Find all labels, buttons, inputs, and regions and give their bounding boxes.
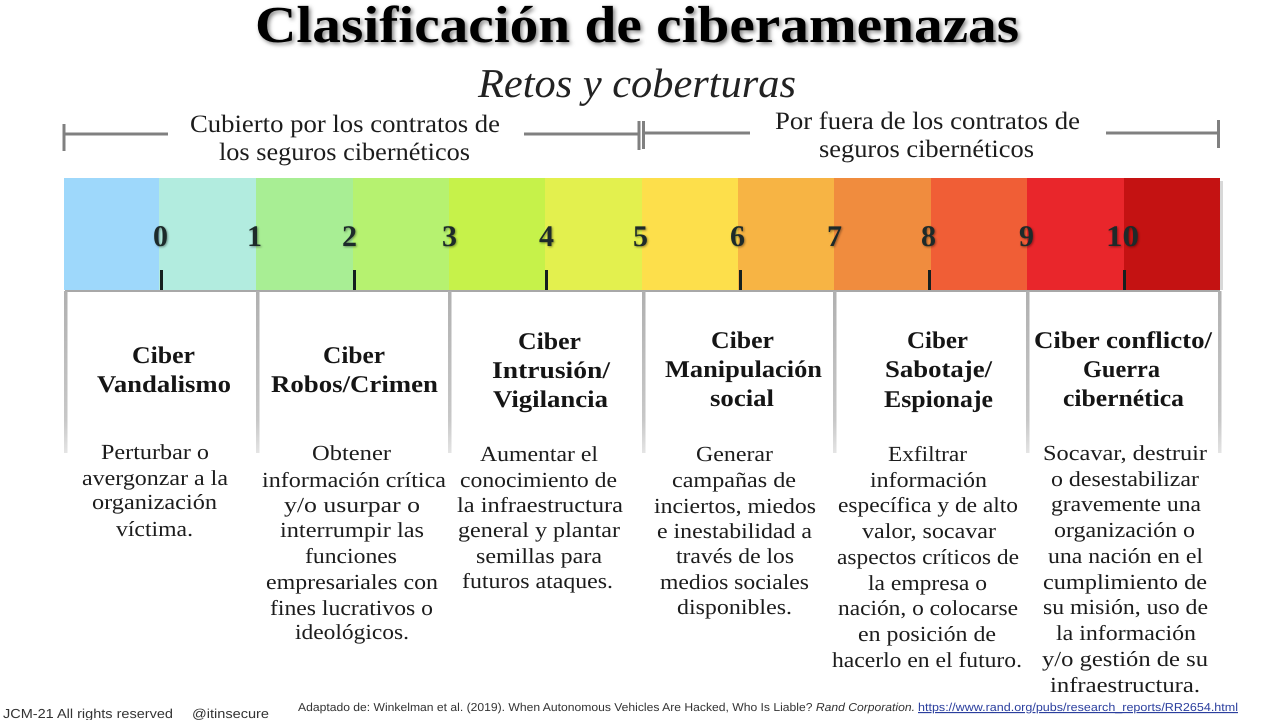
description: ciber robos/crimen: interrumpir las bbox=[280, 518, 424, 542]
description: ciber robos/crimen: fines lucrativos o bbox=[270, 596, 433, 620]
description: ciber sabotaje/espionaje: información bbox=[870, 468, 987, 492]
description: ciber sabotaje/espionaje: nación, o colocarse bbox=[838, 596, 1018, 620]
bracket: covered by cyber insurance bbox=[62, 111, 640, 166]
heading: ciber vandalismo: Ciber bbox=[132, 343, 195, 369]
description: ciber conflicto/guerra cibernética: una nación en el bbox=[1048, 544, 1203, 568]
description: ciber manipulación social: inciertos, miedos bbox=[654, 494, 816, 518]
column divider lines bbox=[64, 290, 1222, 453]
description: ciber vandalismo bbox=[82, 440, 228, 541]
heading: ciber robos/crimen: Robos/Crimen bbox=[271, 372, 438, 398]
description: ciber manipulación social: campañas de bbox=[672, 468, 796, 492]
footer: source link: https://www.rand.org/pubs/research_reports/RR2654.html bbox=[918, 702, 1238, 714]
description: ciber sabotaje/espionaje: valor, socavar bbox=[862, 519, 996, 543]
scale numbers: 9 bbox=[1019, 220, 1034, 253]
scale numbers: 2 bbox=[342, 220, 357, 253]
description: ciber sabotaje/espionaje: Exfiltrar bbox=[888, 442, 967, 466]
heading: ciber manipulación social: social bbox=[710, 386, 774, 412]
description: ciber conflicto/guerra cibernética bbox=[1042, 441, 1208, 697]
description: ciber sabotaje/espionaje: la empresa o bbox=[868, 571, 987, 595]
description: ciber conflicto/guerra cibernética: cumplimiento de bbox=[1043, 570, 1207, 594]
heading: ciber vandalismo bbox=[97, 343, 231, 398]
subtitle: Retos y coberturas bbox=[477, 60, 796, 106]
bracket label: covered bbox=[190, 111, 500, 166]
heading: ciber conflicto/guerra cibernética: Guerra bbox=[1083, 357, 1160, 383]
scale numbers: 8 bbox=[921, 220, 936, 253]
heading: ciber sabotaje/espionaje: Ciber bbox=[907, 328, 968, 354]
description: ciber conflicto/guerra cibernética: gravemente una bbox=[1051, 492, 1201, 516]
scale tick marks bbox=[160, 270, 1126, 291]
heading: ciber sabotaje/espionaje bbox=[884, 328, 993, 413]
heading: ciber intrusión/vigilancia bbox=[492, 329, 610, 413]
description: ciber sabotaje/espionaje: específica y de alto bbox=[838, 493, 1018, 517]
heading: ciber robos/crimen: Ciber bbox=[323, 343, 385, 369]
description: ciber conflicto/guerra cibernética: y/o gestión de su bbox=[1042, 647, 1208, 671]
description: ciber conflicto/guerra cibernética: Socavar, destruir bbox=[1043, 441, 1207, 465]
description: ciber robos/crimen: y/o usurpar o bbox=[284, 493, 420, 517]
description: ciber sabotaje/espionaje: hacerlo en el futuro. bbox=[832, 648, 1022, 672]
description: ciber intrusión/vigilancia: general y plantar bbox=[458, 518, 620, 542]
description: ciber sabotaje/espionaje: aspectos críticos de bbox=[837, 545, 1019, 569]
description: ciber intrusión/vigilancia: futuros ataques. bbox=[462, 569, 613, 593]
scale numbers: 7 bbox=[827, 220, 842, 253]
description: ciber intrusión/vigilancia: semillas para bbox=[476, 544, 602, 568]
description: ciber intrusión/vigilancia: conocimiento de bbox=[460, 468, 617, 492]
description: ciber sabotaje/espionaje: en posición de bbox=[858, 622, 996, 646]
description: ciber manipulación social: e inestabilidad a bbox=[657, 519, 813, 543]
description: ciber vandalismo: víctima. bbox=[116, 517, 193, 541]
description: ciber manipulación social bbox=[654, 442, 816, 619]
bracket label: covered: los seguros cibernéticos bbox=[219, 139, 470, 166]
description: ciber sabotaje/espionaje bbox=[832, 442, 1022, 672]
bracket: outside cyber insurance bbox=[642, 108, 1220, 163]
heading: ciber conflicto/guerra cibernética: cibernética bbox=[1063, 386, 1184, 412]
description: ciber vandalismo: avergonzar a la bbox=[82, 466, 228, 490]
footer: source citation: Adaptado de: Winkelman et al. (2019). When Autonomous Vehicles Are Hacked, Who Is Liable? Rand Corporation. bbox=[298, 702, 915, 714]
description: ciber robos/crimen: Obtener bbox=[312, 441, 391, 465]
description: ciber intrusión/vigilancia bbox=[457, 442, 624, 593]
scale numbers: 6 bbox=[730, 220, 745, 253]
panel: ciber conflicto/guerra cibernética bbox=[1034, 328, 1212, 697]
description: ciber robos/crimen: ideológicos. bbox=[295, 620, 409, 644]
severity colour scale bbox=[64, 178, 1223, 290]
scale numbers bbox=[153, 220, 1139, 253]
scale numbers: 5 bbox=[633, 220, 648, 253]
description: ciber conflicto/guerra cibernética: o desestabilizar bbox=[1051, 467, 1199, 491]
description: ciber robos/crimen: funciones bbox=[305, 544, 397, 568]
description: ciber conflicto/guerra cibernética: su misión, uso de bbox=[1043, 595, 1208, 619]
heading: ciber sabotaje/espionaje: Sabotaje/ bbox=[885, 357, 992, 383]
description: ciber robos/crimen: empresariales con bbox=[266, 570, 438, 594]
scale numbers: 3 bbox=[442, 220, 457, 253]
panel: ciber robos/crimen bbox=[262, 343, 446, 644]
panel: ciber vandalismo bbox=[82, 343, 231, 541]
heading: ciber conflicto/guerra cibernética: Ciber conflicto/ bbox=[1034, 328, 1212, 354]
heading: ciber intrusión/vigilancia: Vigilancia bbox=[493, 387, 608, 413]
heading: ciber intrusión/vigilancia: Ciber bbox=[518, 329, 581, 355]
description: ciber conflicto/guerra cibernética: organización o bbox=[1054, 518, 1195, 542]
bracket label: covered: Cubierto por los contratos de bbox=[190, 111, 500, 138]
bracket label: outside: seguros cibernéticos bbox=[819, 136, 1034, 163]
description: ciber vandalismo: organización bbox=[92, 490, 217, 514]
description: ciber intrusión/vigilancia: la infraestructura bbox=[457, 493, 624, 517]
bracket label: outside bbox=[775, 108, 1080, 163]
description: ciber manipulación social: Generar bbox=[696, 442, 773, 466]
bracket label: outside: Por fuera de los contratos de bbox=[775, 108, 1080, 135]
heading: ciber intrusión/vigilancia: Intrusión/ bbox=[492, 358, 610, 384]
description: ciber manipulación social: medios sociales bbox=[660, 570, 809, 594]
scale numbers: 10 bbox=[1106, 220, 1139, 253]
scale numbers: 1 bbox=[247, 220, 262, 253]
description: ciber robos/crimen: información crítica bbox=[262, 468, 446, 492]
panel: ciber manipulación social bbox=[654, 328, 822, 619]
panel: ciber intrusión/vigilancia bbox=[457, 329, 624, 593]
description: ciber vandalismo: Perturbar o bbox=[101, 440, 209, 464]
heading: ciber manipulación social bbox=[665, 328, 822, 412]
description: ciber conflicto/guerra cibernética: la información bbox=[1056, 621, 1196, 645]
heading: ciber sabotaje/espionaje: Espionaje bbox=[884, 387, 993, 413]
scale numbers: 4 bbox=[539, 220, 554, 253]
heading: ciber conflicto/guerra cibernética bbox=[1034, 328, 1212, 412]
description: ciber manipulación social: través de los bbox=[676, 544, 794, 568]
panel: ciber sabotaje/espionaje bbox=[832, 328, 1022, 672]
description: ciber robos/crimen bbox=[262, 441, 446, 644]
heading: ciber vandalismo: Vandalismo bbox=[97, 372, 231, 398]
heading: ciber manipulación social: Ciber bbox=[711, 328, 774, 354]
description: ciber manipulación social: disponibles. bbox=[677, 595, 792, 619]
description: ciber intrusión/vigilancia: Aumentar el bbox=[480, 442, 598, 466]
description: ciber conflicto/guerra cibernética: infraestructura. bbox=[1050, 673, 1200, 697]
scale numbers: 0 bbox=[153, 220, 168, 253]
heading: ciber manipulación social: Manipulación bbox=[665, 357, 822, 383]
heading: ciber robos/crimen bbox=[271, 343, 438, 398]
